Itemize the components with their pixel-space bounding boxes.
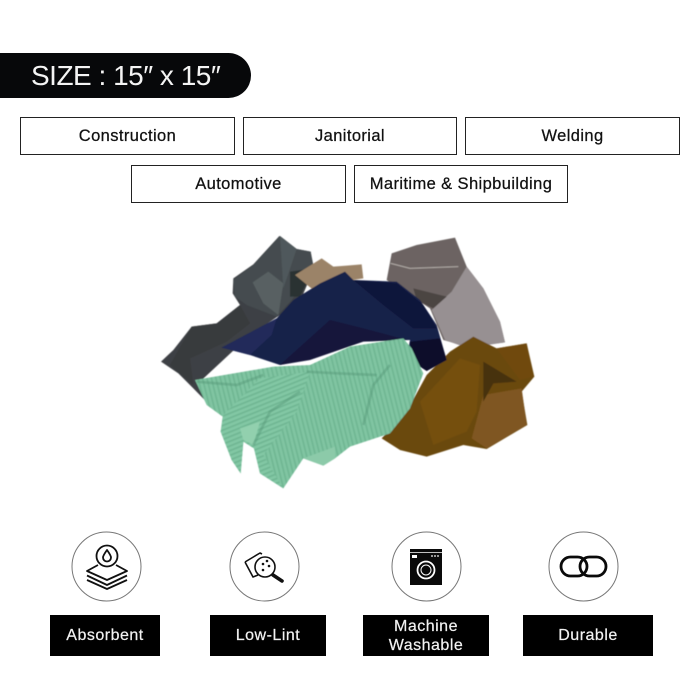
size banner [0, 53, 251, 98]
dark grey cloth [161, 236, 314, 401]
feature label: Durable: Durable [558, 627, 618, 644]
use-case tag: Welding [465, 117, 680, 155]
feature label: Machine Washable: Washable [389, 636, 463, 654]
grey-brown cloth [387, 238, 505, 347]
feature label: Low-Lint: Low-Lint [236, 627, 300, 644]
feature label: Absorbent [50, 615, 160, 656]
feature label: Machine Washable: Machine [394, 618, 458, 634]
brown cloth [382, 337, 534, 457]
feature label: Low-Lint [210, 615, 326, 656]
use-case tag: Automotive [131, 165, 346, 203]
feature label: Absorbent: Absorbent [66, 627, 144, 644]
size banner: SIZE : 15″ x 15″ [31, 60, 220, 91]
use-case tag: Construction [20, 117, 235, 155]
use-case tag: Construction: Construction [79, 127, 176, 145]
tan cloth [295, 258, 363, 290]
use-case tag: Janitorial [243, 117, 457, 155]
navy cloth [222, 272, 447, 371]
use-case tag: Maritime & Shipbuilding: Maritime & Shipbuilding [370, 175, 552, 193]
feature label: Durable [523, 615, 653, 656]
use-case tag: Janitorial: Janitorial [315, 127, 385, 145]
feature label: Machine Washable [363, 615, 489, 656]
use-case tag: Automotive: Automotive [195, 175, 282, 193]
use-case tag: Welding: Welding [541, 127, 604, 145]
folds on green cloth [197, 365, 390, 445]
green corduroy cloth [195, 338, 423, 488]
use-case tag: Maritime & Shipbuilding [354, 165, 568, 203]
